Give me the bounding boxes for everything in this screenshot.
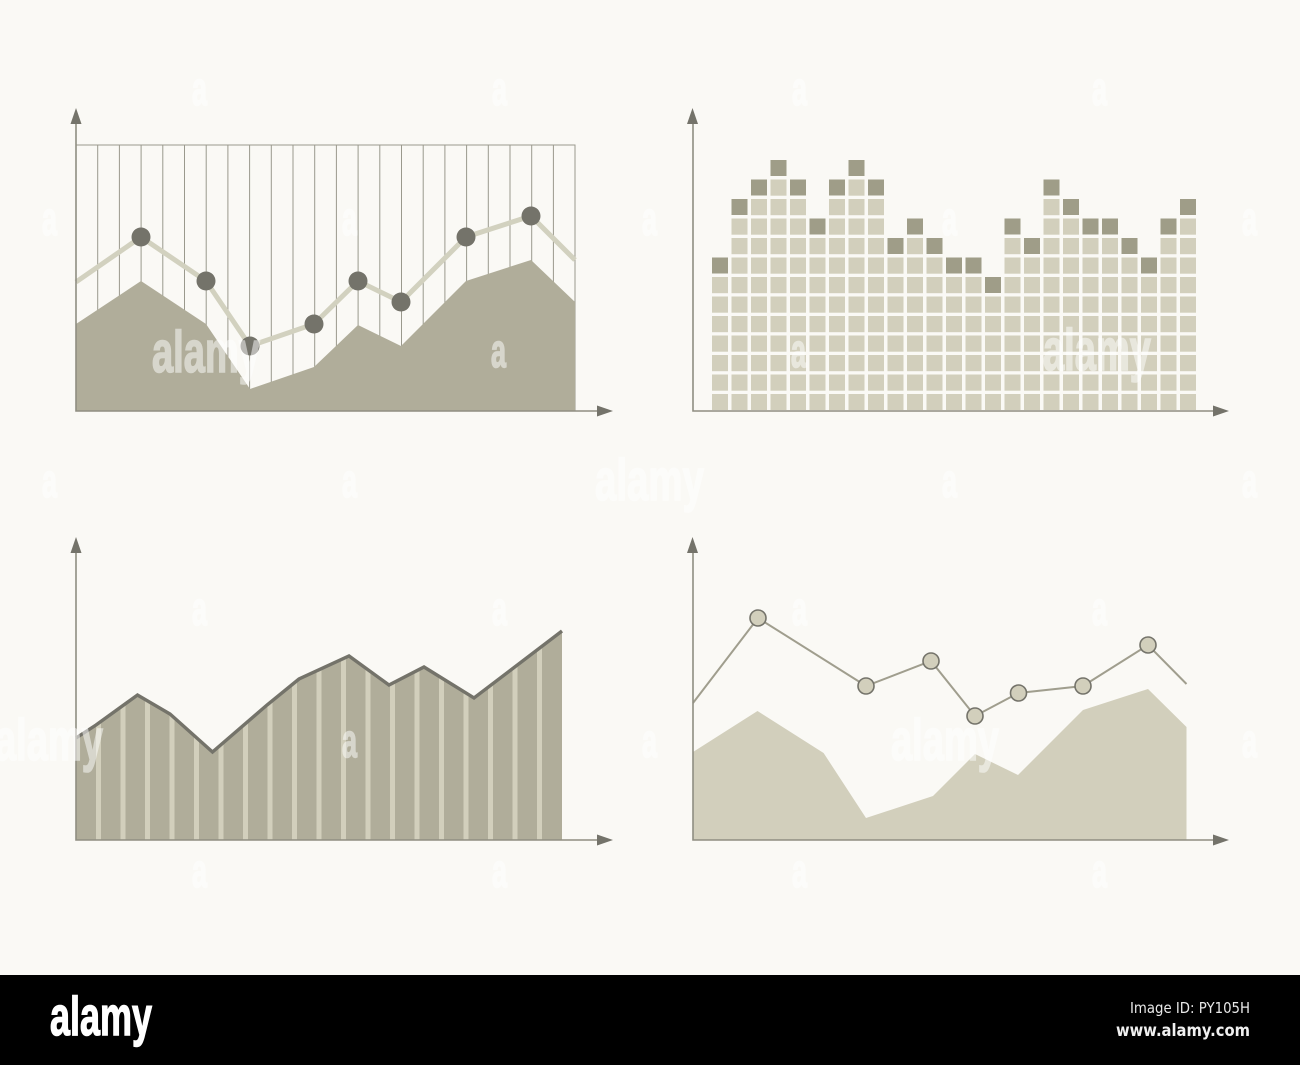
watermarks: a [792, 582, 807, 635]
watermarks: a [492, 62, 507, 115]
watermarks: a [192, 62, 207, 115]
trend line [76, 216, 575, 346]
filled area [76, 631, 562, 840]
watermarks: a [642, 714, 657, 767]
filled area [76, 260, 575, 411]
watermarks: alamy [1043, 318, 1151, 383]
vertical grid lines [76, 145, 575, 411]
watermarks: a [791, 324, 806, 377]
panel: pale area chart with outlined points [687, 537, 1229, 846]
dark top cells [712, 160, 1196, 293]
footer logo: alamy [50, 985, 152, 1047]
watermarks: a [942, 192, 957, 245]
axes [70, 108, 613, 416]
axes [687, 537, 1229, 846]
watermarks: a [342, 454, 357, 507]
image id: Image ID: PY105H [1130, 999, 1250, 1017]
watermarks: a [342, 192, 357, 245]
watermarks: alamy [152, 320, 260, 385]
watermarks: a [342, 714, 357, 767]
footer bar [0, 975, 1300, 1065]
watermarks: a [491, 324, 506, 377]
panel: striped area chart [70, 537, 613, 846]
watermarks: a [192, 582, 207, 635]
watermarks: a [1092, 62, 1107, 115]
data points [132, 206, 540, 356]
thin trend line [693, 618, 1186, 716]
watermarks: a [192, 844, 207, 897]
watermarks: a [1242, 714, 1257, 767]
light stripes [96, 648, 542, 840]
watermarks: a [1242, 454, 1257, 507]
panel: stacked square cell chart [687, 108, 1229, 416]
axes [687, 108, 1229, 416]
light cells [712, 180, 1196, 410]
watermarks: a [1092, 582, 1107, 635]
top line [76, 631, 562, 752]
watermarks: a [1092, 844, 1107, 897]
watermarks: alamy [891, 708, 999, 773]
watermarks: a [792, 844, 807, 897]
filled area [693, 689, 1186, 840]
watermarks [0, 62, 1257, 897]
watermarks: alamy [595, 448, 704, 513]
watermarks: a [492, 582, 507, 635]
panel: area and dotted line chart with vertical grid [70, 108, 613, 416]
axes [70, 537, 613, 846]
watermarks: a [942, 454, 957, 507]
watermarks: a [1242, 192, 1257, 245]
watermarks: a [42, 192, 57, 245]
data points [750, 610, 1156, 724]
watermarks: a [42, 454, 57, 507]
watermarks: a [792, 62, 807, 115]
website: www.alamy.com [1116, 1021, 1250, 1041]
watermarks: a [492, 844, 507, 897]
watermarks: a [642, 192, 657, 245]
